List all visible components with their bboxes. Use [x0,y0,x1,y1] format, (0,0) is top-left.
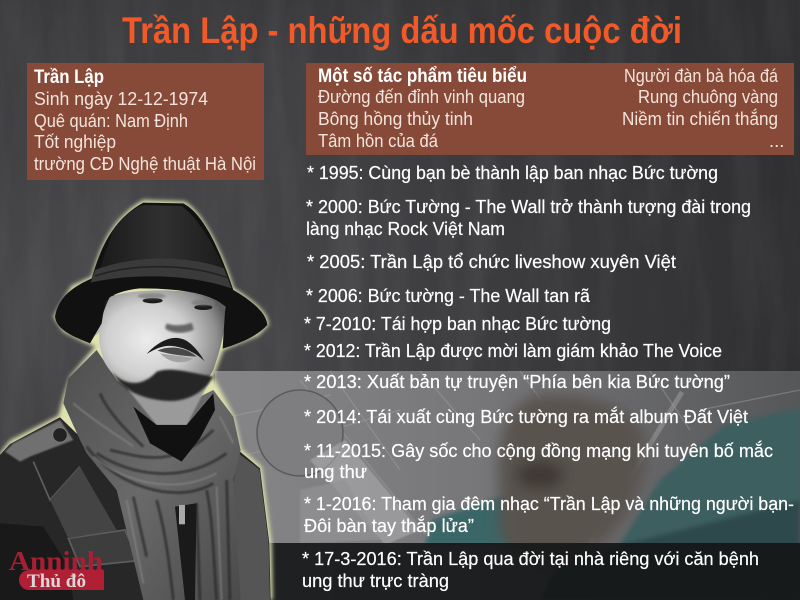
timeline item: 2013: * 2013: Xuất bản tự truyện “Phía bên kia Bức tường” [304,372,730,392]
eye shadows [138,293,215,306]
timeline item: 2012: * 2012: Trần Lập được mời làm giám khảo The Voice [304,341,722,361]
work title: Bông hồng thủy tinh [318,108,473,129]
heading: name: Trần Lập [34,67,104,88]
scarf [63,350,241,600]
heading: works: Một số tác phẩm tiêu biểu [318,66,527,87]
portrait of Trần Lập [0,200,273,600]
panel: biography [27,63,264,180]
text: graduation: Tốt nghiệp [34,131,116,152]
timeline [302,163,794,591]
panel: representative works [306,63,794,155]
timeline item: 2000 [306,197,751,239]
diagonal bed rail [590,392,682,543]
text: birth date: Sinh ngày 12-12-1974 [34,88,208,109]
portrait halo [0,200,273,600]
patient's head [498,394,646,565]
face [99,290,225,400]
jacket [0,417,271,600]
nose shadow [165,323,194,333]
ear [83,301,103,336]
text: hometown: Quê quán: Nam Định [34,110,188,131]
text: school: trường CĐ Nghệ thuật Hà Nội [34,153,256,174]
jacket right panel [233,453,270,600]
work title: Rung chuông vàng [638,86,778,107]
patient's gown [425,408,800,600]
timeline item: 17-3-2016 [302,549,759,591]
timeline item: 2006: * 2006: Bức tường - The Wall tan rã [306,286,591,306]
timeline item: 1-2016 [304,494,794,536]
timeline item: 1995: * 1995: Cùng bạn bè thành lập ban nhạc Bức tường [307,163,718,183]
logo pill [19,570,104,590]
logo subtitle: Thủ đô [27,571,86,592]
timeline item: 17-3-2016: ung thư trực tràng [302,571,449,591]
beard [112,370,213,401]
background photo: hospital scene [215,371,800,600]
hat [55,203,267,349]
work title: Tâm hồn của đá [318,130,439,151]
timeline item: 11-2015: * 11-2015: Gây sốc cho cộng đồng mạng khi tuyên bố mắc [304,440,773,461]
timeline item: 1-2016: Đôi bàn tay thắp lửa” [304,515,474,536]
timeline item: 2000: làng nhạc Rock Việt Nam [306,219,505,239]
eyes [143,298,212,310]
moustache [147,338,205,361]
neck [128,383,208,425]
work title: Người đàn bà hóa đá [624,65,779,86]
logo: An ninh Thủ đô [9,546,104,592]
timeline item: 11-2015 [304,440,773,482]
work title: Niềm tin chiến thắng [622,108,778,129]
timeline item: 2014: * 2014: Tái xuất cùng Bức tường ra mắt album Đất Việt [304,406,748,427]
turtleneck [133,393,215,462]
timeline item: 17-3-2016: * 17-3-2016: Trần Lập qua đời tại nhà riêng với căn bệnh [302,549,759,569]
logo wordmark: Anninh [9,546,103,576]
hair [100,290,115,337]
title: Trần Lập - những dấu mốc cuộc đời [122,10,682,51]
timeline item: 2005: * 2005: Trần Lập tổ chức liveshow xuyên Việt [307,252,676,272]
work title: Đường đến đỉnh vinh quang [318,86,525,107]
lips [157,347,197,362]
timeline item: 11-2015: ung thư [304,462,367,482]
ellipsis: ... [769,130,784,151]
timeline item: 7-2010: * 7-2010: Tái hợp ban nhạc Bức tường [304,314,611,334]
timeline item: 2000: * 2000: Bức Tường - The Wall trở thành tượng đài trong [306,197,751,217]
black jacket front [175,503,197,600]
timeline item: 1-2016: * 1-2016: Tham gia đêm nhạc “Trần Lập và những người bạn- [304,494,794,514]
